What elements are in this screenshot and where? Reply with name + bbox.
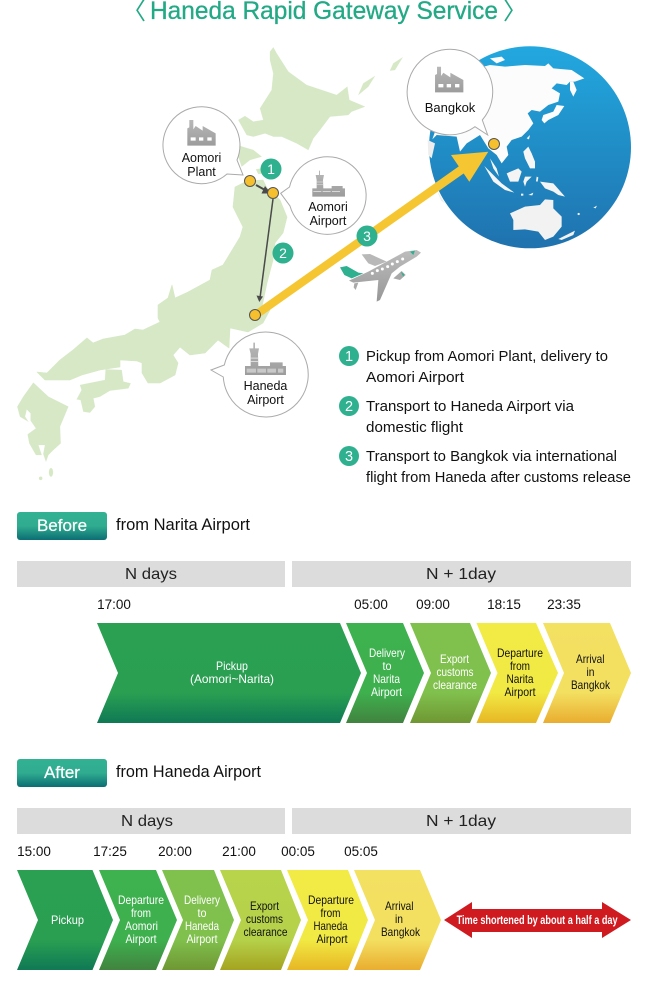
callout: Haneda Airport: Airport — [247, 393, 284, 407]
legend: 3 — [345, 449, 353, 465]
after chevrons: Airport — [126, 932, 157, 946]
before times: 17:00 — [97, 597, 131, 612]
after day bands — [17, 808, 631, 834]
after times — [17, 844, 378, 859]
callout: Bangkok: Bangkok — [425, 100, 476, 115]
after chevrons: Aomori — [125, 919, 158, 933]
after chevrons: Airport — [186, 932, 218, 946]
legend: Transport to Haneda Airport via — [366, 399, 575, 415]
legend — [339, 346, 631, 486]
after chevrons: Pickup — [51, 913, 84, 927]
after chevrons: Departure — [118, 893, 164, 907]
before chevrons: clearance — [433, 678, 477, 692]
before chevrons: Airport — [504, 685, 536, 699]
after chevrons: Haneda — [185, 919, 219, 933]
section: before — [17, 512, 631, 723]
after subtitle: from Haneda Airport — [116, 763, 261, 781]
after chevrons: Export — [250, 899, 280, 913]
before chevrons: customs — [436, 665, 474, 679]
before chevrons: Arrival — [576, 652, 604, 666]
map of Japan — [17, 47, 403, 480]
red double arrow: time shortened — [444, 902, 631, 938]
after times: 05:05 — [344, 844, 378, 859]
before day bands: N + 1day — [426, 566, 496, 583]
after chevrons: Departure — [308, 893, 354, 907]
before chevrons: in — [586, 665, 594, 679]
before times — [97, 597, 581, 612]
callout: Aomori Plant: Aomori — [182, 151, 221, 165]
legend: 2 — [345, 399, 353, 415]
after chevrons: clearance — [244, 925, 288, 939]
callout: Aomori Plant: Plant — [187, 165, 216, 179]
before chevrons: from — [510, 659, 530, 673]
after times: 17:25 — [93, 844, 127, 859]
after chevrons: from — [131, 906, 151, 920]
after chevrons: in — [395, 912, 403, 926]
legend: Transport to Bangkok via international — [366, 449, 617, 465]
legend: flight from Haneda after customs release — [366, 470, 631, 486]
before chevrons: Airport — [371, 685, 403, 699]
after chevrons: Bangkok — [381, 925, 421, 939]
before chevrons: Bangkok — [571, 678, 611, 692]
after chevrons: Arrival — [385, 899, 414, 913]
after chevrons — [17, 870, 441, 970]
before times: 18:15 — [487, 597, 521, 612]
before chevrons: Pickup — [216, 659, 248, 673]
before day bands — [17, 561, 631, 587]
callout: Aomori Airport: Airport — [310, 214, 347, 228]
map step badges: 1 — [267, 161, 275, 177]
route 2 arrow — [256, 199, 273, 302]
callout: Haneda Airport — [211, 332, 308, 417]
before chevrons: to — [382, 659, 392, 673]
after day bands: N + 1day — [426, 813, 496, 830]
after chevrons: from — [320, 906, 341, 920]
legend: domestic flight — [366, 420, 463, 436]
before chevrons: Departure — [497, 646, 543, 660]
after times: 20:00 — [158, 844, 192, 859]
callout: Aomori Airport — [281, 157, 366, 234]
before subtitle: from Narita Airport — [116, 516, 250, 534]
before chevrons: Narita — [373, 672, 400, 686]
route 1 arrow — [256, 185, 271, 194]
after times: 00:05 — [281, 844, 315, 859]
callout: Bangkok — [407, 49, 493, 135]
before button — [17, 512, 107, 540]
before day bands: N days — [125, 566, 177, 583]
legend: 1 — [345, 349, 353, 365]
after button — [17, 759, 107, 787]
after chevrons: Haneda — [314, 919, 348, 933]
legend: Pickup from Aomori Plant, delivery to — [366, 349, 608, 365]
legend: Aomori Airport — [366, 370, 464, 386]
before chevrons: (Aomori~Narita) — [190, 672, 274, 686]
after chevrons: to — [198, 906, 207, 920]
globe — [428, 46, 631, 248]
after chevrons: customs — [246, 912, 283, 926]
before button: Before — [37, 516, 87, 535]
location dots — [244, 138, 500, 320]
after chevrons: Delivery — [184, 893, 220, 907]
map step badges — [260, 158, 378, 264]
map step badges: 2 — [279, 245, 287, 261]
airplane — [340, 250, 421, 302]
callout: Aomori Plant — [163, 107, 243, 184]
after day bands: N days — [121, 813, 173, 830]
section: after — [17, 759, 631, 970]
before times: 05:00 — [354, 597, 388, 612]
after button: After — [44, 763, 80, 782]
route 3: yellow arrow — [253, 152, 488, 319]
before chevrons: Delivery — [369, 646, 405, 660]
before times: 23:35 — [547, 597, 581, 612]
after chevrons: Airport — [316, 932, 348, 946]
map step badges: 3 — [363, 228, 371, 244]
after times: 15:00 — [17, 844, 51, 859]
after times: 21:00 — [222, 844, 256, 859]
before chevrons: Narita — [506, 672, 534, 686]
before chevrons: Export — [440, 652, 470, 666]
before times: 09:00 — [416, 597, 450, 612]
callout: Aomori Airport: Aomori — [308, 200, 348, 214]
callout: Haneda Airport: Haneda — [244, 379, 287, 393]
before chevrons — [97, 623, 631, 723]
